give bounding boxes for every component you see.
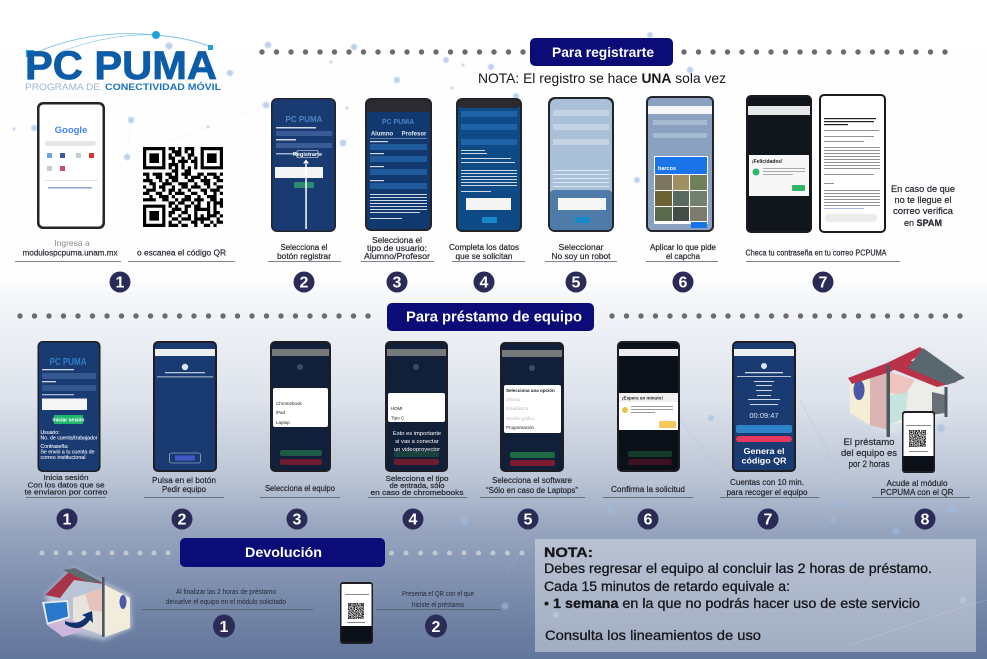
phone: inicio de sesion: No. de cuenta/trabajador [40, 436, 98, 442]
loan step 7 label [720, 478, 819, 498]
step 1 label: Ingresa a [54, 238, 90, 248]
phone: software: Selecciona una opción [506, 388, 555, 393]
loan step 7 label: para recoger el equipo [726, 488, 808, 497]
loan step 3 label [260, 484, 340, 498]
dotted rule: return right [389, 550, 524, 556]
step 2 number [294, 272, 314, 292]
return step 1 text: devuelve el equipo en el módulo solicitado [166, 599, 286, 606]
spam note: En caso de que [891, 184, 955, 194]
step 1 label: modulospcpuma.unam.mx [22, 248, 118, 258]
loan step 4 number: 4 [409, 512, 418, 528]
panel: final note: NOTA: [544, 544, 593, 560]
phone: tipo de usuario [365, 98, 432, 231]
phone: inicio de sesion: PC PUMA [50, 357, 86, 368]
panel: final note: Cada 15 minutos de retardo equivale a: [544, 578, 790, 594]
phone: inicio de sesion: correo institucional [40, 455, 86, 461]
loan note: 2 hours: por 2 horas [848, 459, 890, 469]
panel: final note: Consulta los lineamientos de uso [545, 627, 761, 643]
phone: confirma: ¡Espera un minuto! [622, 396, 664, 400]
step 3 label: Selecciona el [372, 236, 422, 245]
phone: tipo de entrada: si vas a conectar [395, 439, 439, 445]
heading: Para préstamo de equipo: Para préstamo de equipo [406, 310, 582, 326]
phone: felicidades: ¡Felicidades! [752, 159, 783, 165]
step 5 label: No soy un robot [552, 252, 611, 261]
phone: return QR [340, 582, 373, 644]
loan step 8 label: Acude al módulo [886, 479, 948, 488]
phone: selecciona equipo: Chromebook [276, 401, 303, 406]
phone: inicio de sesion: Se envió a tu cuenta de [40, 450, 94, 456]
phone: confirma [617, 341, 680, 472]
step 6 label: el capcha [666, 252, 701, 261]
phone: captcha [646, 96, 714, 232]
step 4 label: que se solicitan [456, 252, 512, 261]
logo: PC PUMA: CONECTIVIDAD MÓVIL [105, 81, 222, 92]
phone: selecciona equipo [270, 341, 331, 472]
heading: Para registrarte [530, 38, 673, 66]
heading: Devolución: Devolución [245, 545, 322, 560]
step 6 label: Aplicar lo que pide [650, 243, 717, 252]
return step 1 text [142, 589, 313, 610]
loan step 8 label: PCPUMA con el QR [880, 488, 954, 497]
loan step 6 label [603, 485, 693, 498]
phone: QR [902, 411, 935, 473]
phone: software: Estadística [506, 406, 529, 411]
loan step 1 number: 1 [63, 512, 72, 528]
step 6 label [646, 243, 718, 262]
panel: final note: Debes regresar el equipo al concluir las 2 horas de préstamo. [544, 560, 932, 576]
step 1 number [110, 272, 130, 292]
loan step 3 number [286, 508, 308, 530]
loan step 3 label: Selecciona el equipo [265, 484, 336, 493]
loan step 4 number [402, 508, 424, 530]
phone: selecciona equipo: Laptop [276, 420, 290, 425]
return step 2 text: hiciste el préstamo [412, 602, 464, 609]
step 5 number: 5 [572, 274, 581, 292]
phone: registrar button: PC PUMA [286, 115, 323, 124]
loan note: 2 hours: del equipo es [841, 448, 898, 458]
step 5 label: Seleccionar [558, 243, 604, 252]
loan step 4 label: Selecciona el tipo [386, 474, 448, 483]
phone: genera QR: código QR [742, 456, 786, 466]
phone: inicio de sesion: Iniciar sesión [53, 418, 84, 424]
return step 2 number [425, 614, 447, 638]
step 2 label: Selecciona el [280, 243, 328, 252]
dotted rule: return left [40, 550, 170, 556]
loan step 2 number [172, 508, 192, 530]
dotted rule: loan right [609, 313, 963, 319]
phone: tipo de entrada: un videoproyector [394, 447, 440, 453]
phone: inicio de sesion: Usuario: [40, 430, 60, 436]
loan step 8 number [914, 508, 936, 530]
step 7 label: Checa tu contraseña en tu correo PCPUMA [746, 248, 887, 258]
phone: tipo de usuario: PC PUMA [382, 119, 414, 126]
return step 2 number: 2 [432, 619, 441, 636]
step 5 label [545, 243, 617, 262]
step 2 label [268, 243, 341, 262]
loan step 7 number: 7 [764, 512, 773, 528]
phone: tipo de entrada: HDMI [391, 406, 402, 411]
phone: selecciona equipo: iPad [276, 410, 286, 415]
step 3 number: 3 [393, 274, 402, 292]
panel: registration steps [15, 94, 955, 292]
dotted rule: register right [681, 49, 948, 55]
step 1 label: o escanea el código QR [137, 248, 226, 258]
loan step 5 number [518, 508, 538, 530]
step 4 number [474, 272, 494, 292]
phone: inicio de sesion: Contraseña: [40, 444, 68, 450]
loan note: 2 hours [841, 437, 898, 469]
phone: Google search [37, 102, 105, 229]
loan step 6 label: Confirma la solicitud [611, 485, 685, 494]
phone: genera QR: 00:09:47 [749, 411, 779, 420]
illustration: PC PUMA module [848, 347, 965, 437]
loan step 2 label: Pulsa en el botón [152, 476, 216, 485]
loan step 3 number: 3 [293, 512, 302, 528]
loan step 1 number [56, 508, 78, 530]
step 1 label [15, 238, 235, 262]
step 7 number [812, 272, 834, 292]
panel: final note [535, 539, 976, 652]
loan step 4 label: en caso de chromebooks [370, 488, 464, 497]
phone: registrar button: Registrarte [293, 152, 322, 158]
phone: correo [819, 94, 886, 233]
loan step 8 number: 8 [921, 512, 930, 528]
heading: Devolución [180, 538, 385, 567]
phone: tipo de usuario: Alumno [371, 132, 393, 138]
loan step 4 label [368, 474, 467, 498]
illustration: return module with laptop [42, 568, 132, 640]
step 2 number: 2 [300, 274, 309, 292]
step 3 number [386, 272, 408, 292]
phone: tipo de entrada: Esto es importante [393, 431, 441, 437]
loan step 5 label [480, 476, 585, 498]
loan step 5 number: 5 [524, 512, 533, 528]
step 6 number: 6 [679, 274, 688, 292]
phone: genera QR [732, 341, 796, 472]
step 2 label: botón registrar [277, 252, 331, 261]
step 1 number: 1 [116, 274, 125, 292]
panel: loan steps [24, 341, 970, 530]
phone: software [500, 342, 564, 472]
step 4 label: Completa los datos [449, 243, 519, 252]
spam note [891, 184, 955, 228]
QR code [143, 147, 223, 227]
loan step 8 label [872, 479, 970, 498]
phone: pedir equipo [153, 341, 217, 472]
heading: Para registrarte: Para registrarte [552, 44, 654, 60]
phone: no soy un robot [548, 97, 614, 232]
phone: genera QR: Genera el [744, 446, 784, 456]
step 4 number: 4 [480, 274, 489, 292]
loan step 1 label: Con los datos que se [28, 480, 104, 490]
return step 1 number: 1 [220, 619, 229, 636]
phone: software: Diseño gráfico [506, 416, 535, 421]
loan step 5 label: Selecciona el software [492, 476, 573, 485]
loan step 5 label: “Sólo en caso de Laptops” [486, 486, 578, 495]
logo: PC PUMA: PC PUMA [25, 44, 217, 88]
phone: software: Programación [506, 425, 535, 430]
loan step 6 number [638, 508, 658, 530]
heading: Para préstamo de equipo [387, 303, 594, 331]
step 5 number [566, 272, 586, 292]
return step 1 text: Al finalizar las 2 horas de préstamo [176, 589, 276, 596]
loan step 7 number [758, 508, 778, 530]
loan note: 2 hours: El préstamo [844, 437, 894, 447]
phone: inicio de sesion [38, 341, 100, 472]
loan step 7 label: Cuentas con 10 min. [730, 478, 804, 487]
phone: tipo de usuario: Profesor [402, 132, 427, 138]
return step 2 text [376, 591, 500, 610]
loan step 4 label: de entrada, sólo [390, 481, 444, 490]
step 7 number: 7 [819, 274, 828, 292]
loan step 1 label: te enviaron por correo [24, 488, 108, 496]
logo: PC PUMA: PROGRAMA DE [25, 82, 100, 92]
dotted rule: register left [259, 49, 526, 55]
step 4 label [449, 243, 525, 262]
panel: final note: • 1 semana en la que no podrás hacer uso de este servicio [544, 595, 920, 611]
phone: tipo de entrada: Tipo C [391, 416, 405, 420]
phone: completa datos [456, 98, 522, 232]
spam note: correo verifica [893, 206, 953, 216]
return step 2 text: Presenta el QR con el que [402, 591, 474, 598]
dotted rule: loan left [17, 313, 371, 319]
phone: Google search: Google [55, 125, 87, 136]
loan step 2 label [144, 476, 224, 498]
phone: felicidades [746, 95, 812, 233]
loan step 1 label [24, 473, 108, 498]
phone: tipo de entrada [385, 341, 448, 472]
note: register once: NOTA: El registro se hace UNA sola vez [478, 70, 726, 86]
phone: registrar button [271, 98, 336, 232]
panel: return steps [42, 568, 500, 644]
phone: captcha: barcos [658, 166, 676, 172]
logo: PC PUMA [25, 31, 222, 92]
phone: software: Oficina [506, 397, 521, 402]
loan step 2 number: 2 [178, 512, 187, 528]
step 3 label: tipo de usuario: [367, 244, 427, 253]
step 3 label [361, 236, 434, 262]
loan step 6 number: 6 [644, 512, 653, 528]
step 6 number [672, 272, 694, 292]
step 3 label: Alumno/Profesor [364, 252, 430, 261]
loan step 1 label: Inicia sesión [44, 473, 88, 482]
loan step 2 label: Pedir equipo [162, 485, 207, 494]
spam note: en SPAM [904, 218, 942, 228]
return step 1 number [213, 614, 235, 638]
spam note: no te llegue el [894, 195, 952, 205]
